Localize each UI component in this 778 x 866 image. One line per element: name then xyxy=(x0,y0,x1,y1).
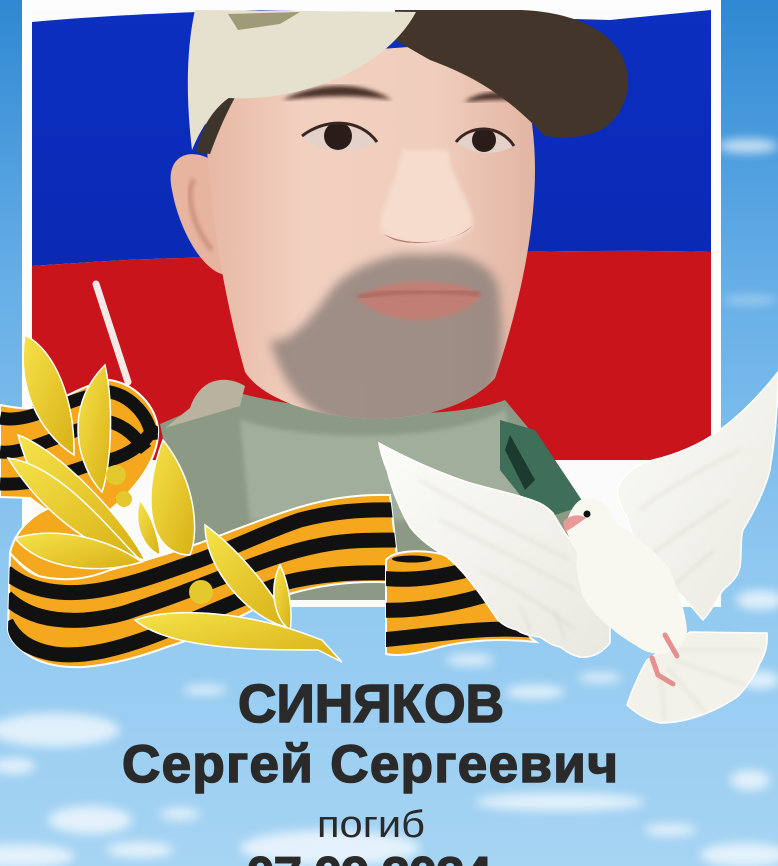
shoulder left xyxy=(165,380,245,428)
nose xyxy=(381,150,473,245)
dove: tail feathers xyxy=(660,650,760,720)
dove: body and head xyxy=(565,498,687,654)
dove: eye xyxy=(584,510,590,518)
dove: tail xyxy=(627,632,767,723)
dove: feet xyxy=(652,635,677,684)
left brow xyxy=(282,86,392,100)
ribbon: St. George ribbon xyxy=(0,380,536,667)
icon: white dove xyxy=(379,372,778,723)
flag xyxy=(32,10,711,600)
flag: blue band xyxy=(32,10,711,266)
ribbon: upper-left loop xyxy=(0,380,158,520)
title: given name: Сергей Сергеевич xyxy=(122,735,618,794)
flag: white band xyxy=(32,10,711,600)
jacket xyxy=(160,392,600,600)
icon: laurel branch, lower xyxy=(135,525,342,662)
cap: shadow under brim xyxy=(196,92,238,154)
left eye xyxy=(302,122,377,151)
dove: left wing xyxy=(379,443,610,657)
ribbon: black stripes xyxy=(6,510,400,655)
right brow xyxy=(464,92,527,102)
flag: red band xyxy=(32,251,711,460)
panel: white photo frame xyxy=(22,0,721,607)
cap: dark crown xyxy=(395,10,628,137)
text: died: погиб xyxy=(317,804,425,846)
ribbon: inner fold xyxy=(10,505,150,585)
berries xyxy=(106,465,126,485)
beard xyxy=(270,254,502,431)
cap xyxy=(188,10,628,154)
ribbon: main band xyxy=(6,495,400,667)
collar right xyxy=(500,420,585,520)
icon: laurel branch, upper xyxy=(8,335,195,569)
ear xyxy=(171,154,225,275)
dove: right wing xyxy=(617,372,778,620)
ribbon: right tail xyxy=(380,551,536,655)
right eye xyxy=(456,128,514,153)
head and neck xyxy=(205,40,535,418)
mouth xyxy=(356,282,482,320)
dove: wing feather lines xyxy=(420,450,740,640)
antenna xyxy=(96,284,128,382)
portrait xyxy=(160,10,628,600)
cap: light crown and brim xyxy=(188,10,416,150)
dove: beak xyxy=(563,515,586,532)
title: surname: СИНЯКОВ xyxy=(238,674,504,734)
